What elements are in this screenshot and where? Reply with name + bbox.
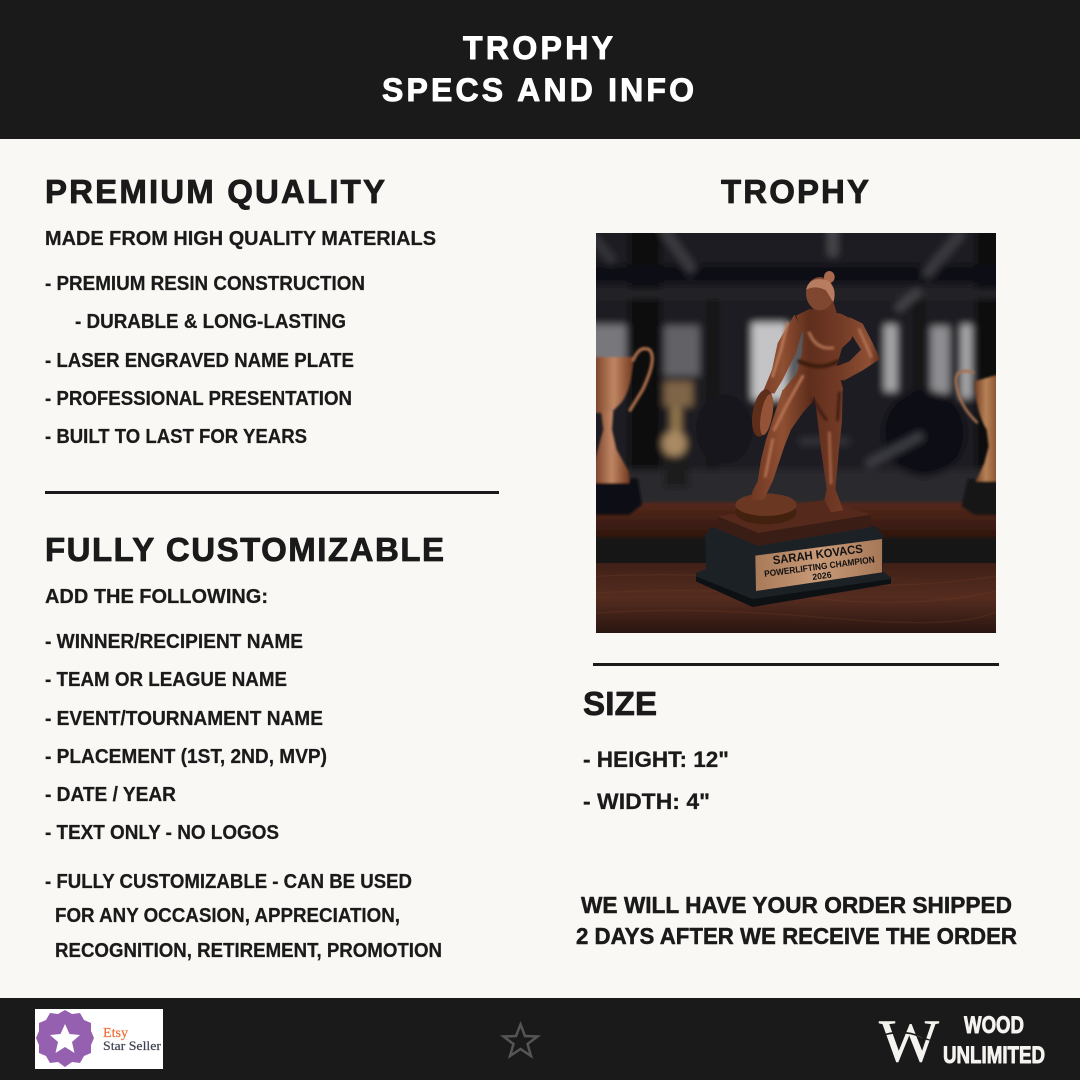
logo: wood unlimited: WOOD <box>964 1012 1024 1039</box>
text block: dimensions <box>583 747 729 814</box>
engraved plaque <box>755 539 882 591</box>
text block: quality list: MADE FROM HIGH QUALITY MATERIALS <box>45 228 436 250</box>
text block: dimensions: - WIDTH: 4" <box>583 789 710 814</box>
engraved plaque: POWERLIFTING CHAMPION <box>764 554 875 579</box>
panel: size <box>583 685 729 814</box>
engraved plaque: SARAH KOVACS <box>772 542 864 567</box>
figure highlights <box>765 323 871 483</box>
text block: quality list <box>45 228 436 448</box>
text block: quality list: - PROFESSIONAL PRESENTATION <box>45 388 352 410</box>
left background trophy <box>594 349 652 515</box>
text block: customization list: - WINNER/RECIPIENT NAME <box>45 631 303 653</box>
callout: shipping note <box>576 892 1017 949</box>
callout: shipping note: 2 DAYS AFTER WE RECEIVE THE ORDER <box>576 923 1017 949</box>
wooden base <box>718 500 871 546</box>
heading: trophy: TROPHY <box>721 173 869 210</box>
title: TROPHY <box>463 30 613 66</box>
text block: customization list: - DATE / YEAR <box>45 784 177 806</box>
text block: quality list: - DURABLE & LONG-LASTING <box>75 311 346 333</box>
text block: customization list: - EVENT/TOURNAMENT NAME <box>45 708 323 730</box>
text block: customization list: FOR ANY OCCASION, APPRECIATION, <box>55 905 400 927</box>
text block: customization list: - TEXT ONLY - NO LOGOS <box>45 822 279 844</box>
badge: Etsy star seller: Star Seller <box>103 1038 162 1053</box>
weight plate under foot <box>735 493 797 524</box>
photo: trophy on table in gym <box>583 220 1009 633</box>
shelf <box>593 502 999 538</box>
logo: wood unlimited <box>878 1008 1045 1074</box>
text block: customization list: ADD THE FOLLOWING: <box>45 586 268 608</box>
blurred gym background <box>596 233 996 502</box>
statue figure <box>749 271 880 512</box>
black base <box>696 526 891 607</box>
callout: shipping note: WE WILL HAVE YOUR ORDER SHIPPED <box>581 892 1012 918</box>
right background trophy <box>956 371 998 515</box>
header band <box>0 0 1080 139</box>
text block: customization list: - PLACEMENT (1ST, 2ND, MVP) <box>45 746 327 768</box>
text block: customization list: - FULLY CUSTOMIZABLE - CAN BE USED <box>45 871 412 893</box>
logo: wood unlimited: W <box>879 1008 939 1074</box>
heading: fully customizable: FULLY CUSTOMIZABLE <box>45 531 444 568</box>
heading: size: SIZE <box>583 685 657 722</box>
icon: purple star badge <box>36 1010 94 1067</box>
text block: quality list: - PREMIUM RESIN CONSTRUCTION <box>45 273 365 295</box>
logo: wood unlimited: UNLIMITED <box>943 1042 1045 1069</box>
title: SPECS AND INFO <box>382 72 694 108</box>
badge: Etsy star seller <box>35 1009 163 1069</box>
title <box>382 30 694 108</box>
engraved plaque: 2026 <box>812 570 832 582</box>
text block: customization list: RECOGNITION, RETIREMENT, PROMOTION <box>55 940 442 962</box>
text block: customization list <box>45 586 442 962</box>
text block: quality list: - LASER ENGRAVED NAME PLATE <box>45 350 354 372</box>
icon: star outline <box>504 1024 538 1056</box>
panel: premium quality <box>45 173 436 448</box>
badge: Etsy star seller: Etsy <box>103 1026 128 1041</box>
panel: fully customizable <box>45 531 444 962</box>
footer band <box>0 998 1080 1080</box>
heading: premium quality: PREMIUM QUALITY <box>45 173 385 210</box>
front table <box>596 563 996 633</box>
text block: dimensions: - HEIGHT: 12" <box>583 747 729 772</box>
text block: quality list: - BUILT TO LAST FOR YEARS <box>45 426 307 448</box>
text block: customization list: - TEAM OR LEAGUE NAME <box>45 669 287 691</box>
